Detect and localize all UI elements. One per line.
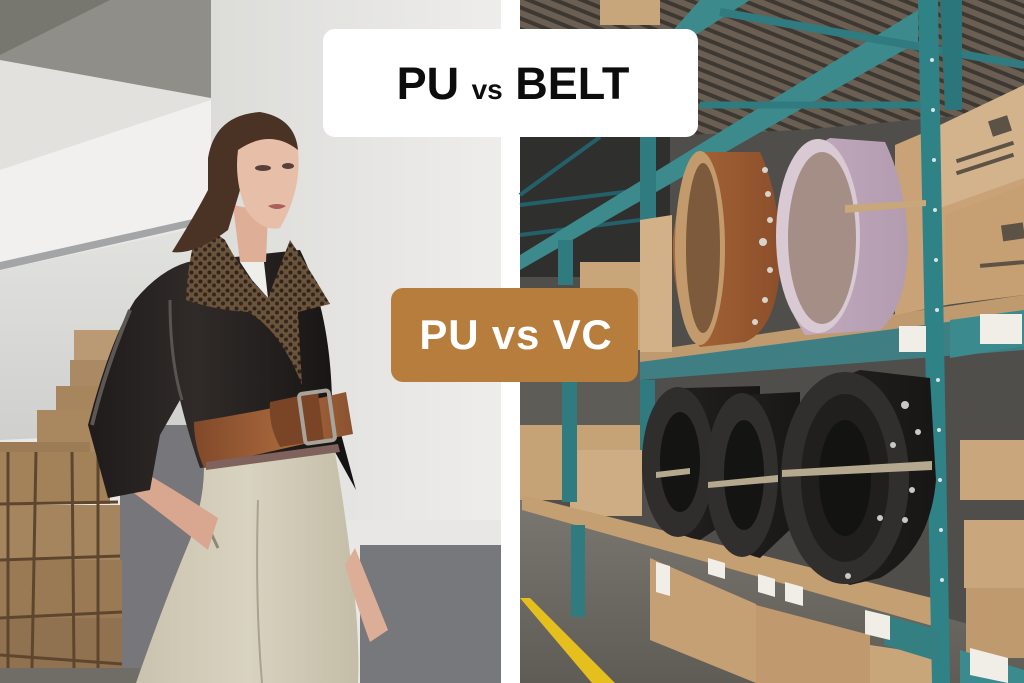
- shelf labels: [656, 314, 1022, 683]
- face: [237, 139, 299, 229]
- trousers: [136, 452, 358, 683]
- title banner: PU vs BELT: [397, 58, 629, 108]
- jacket: [88, 250, 356, 498]
- lilac belt roll: [776, 138, 926, 335]
- neck: [233, 205, 268, 262]
- hair: [172, 112, 298, 252]
- collar: [186, 222, 330, 385]
- rack uprights: [884, 0, 1024, 683]
- white divider: [501, 0, 520, 683]
- title banner: [323, 29, 698, 137]
- hand right: [345, 548, 388, 642]
- subtitle badge: PU vs VC: [419, 311, 613, 358]
- model in jacket and belt: [88, 112, 388, 683]
- cartons on shelves: [640, 85, 1024, 683]
- brown belt roll: [673, 151, 780, 347]
- right photo: warehouse background: [520, 0, 1024, 683]
- left photo: stacked cartons: [0, 330, 124, 668]
- shirt: [240, 262, 268, 298]
- subtitle badge: [391, 288, 638, 382]
- black belt rolls: [642, 370, 936, 585]
- belt: [194, 392, 353, 468]
- rack shelves: [520, 0, 1024, 628]
- left photo: studio background: [0, 0, 501, 683]
- forearm left skin: [130, 470, 218, 550]
